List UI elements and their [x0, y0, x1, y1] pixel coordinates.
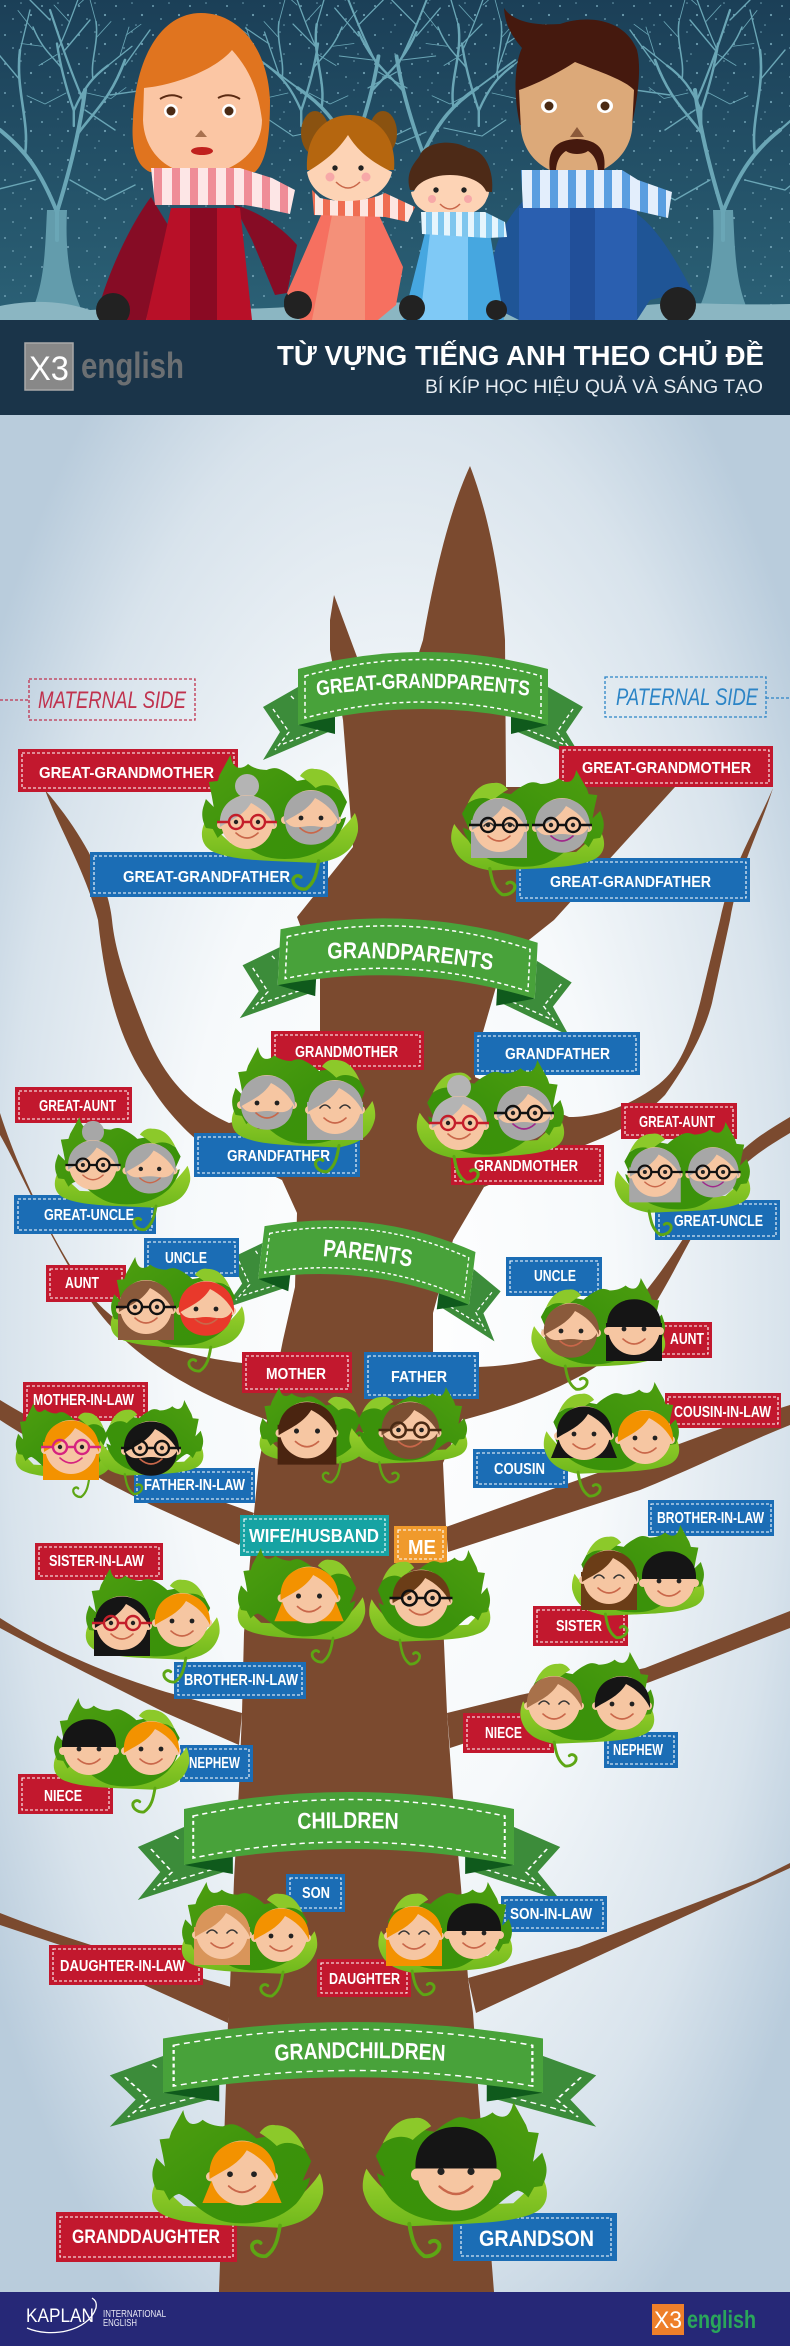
person: father — [487, 8, 696, 323]
label: great-grandmother maternal — [18, 749, 238, 792]
label: brother-in-law maternal — [174, 1662, 306, 1699]
face: mother — [276, 1402, 338, 1465]
label: uncle maternal — [144, 1238, 239, 1277]
label: wife/husband: WIFE/HUSBAND — [249, 1526, 379, 1546]
ribbon: grandparents — [240, 918, 572, 1032]
label: cousin-in-law — [665, 1393, 781, 1428]
face: daughter-in-law — [192, 1905, 252, 1965]
face: father — [378, 1402, 442, 1459]
label: great-uncle maternal — [14, 1195, 156, 1234]
label: grandmother paternal — [451, 1145, 604, 1185]
label: great-aunt paternal: GREAT-AUNT — [639, 1114, 715, 1131]
face: sister-in-law — [92, 1596, 152, 1656]
face: great-uncle paternal — [685, 1147, 741, 1198]
label: father-in-law — [134, 1468, 255, 1503]
face: cousin-in-law — [551, 1406, 617, 1460]
label: nephew maternal — [180, 1745, 253, 1782]
label: grandfather paternal: GRANDFATHER — [505, 1046, 610, 1063]
label: great-grandmother maternal: GREAT-GRANDMOTHER — [39, 765, 214, 782]
face: sister — [579, 1550, 639, 1610]
ribbon: grandchildren — [110, 2022, 596, 2127]
person: mother — [96, 13, 310, 327]
label: me: ME — [408, 1537, 436, 1559]
logo: X3english grey: english — [81, 345, 184, 386]
label: nephew paternal — [604, 1732, 678, 1768]
label: grandmother maternal — [271, 1031, 424, 1070]
label: niece maternal: NIECE — [44, 1788, 82, 1805]
label: son-in-law: SON-IN-LAW — [510, 1906, 593, 1923]
label: mother-in-law: MOTHER-IN-LAW — [33, 1392, 135, 1409]
label: grandfather paternal — [474, 1032, 640, 1075]
label: niece maternal — [18, 1774, 113, 1814]
label: granddaughter — [56, 2212, 237, 2262]
logo: X3english grey — [25, 343, 184, 390]
logo: Kaplan International English: INTERNATIONAL — [103, 2309, 166, 2320]
face: great-grandmother maternal — [217, 774, 277, 849]
maternal side tag — [0, 679, 195, 720]
leaves — [16, 755, 750, 2256]
face: grandfather maternal — [237, 1075, 297, 1130]
label: son-in-law — [501, 1896, 607, 1932]
face: daughter — [384, 1906, 444, 1966]
logo: Kaplan International English: ENGLISH — [103, 2318, 137, 2329]
label: father-in-law: FATHER-IN-LAW — [144, 1477, 246, 1494]
label: nephew paternal: NEPHEW — [613, 1742, 664, 1759]
face: son — [251, 1908, 311, 1962]
label: granddaughter: GRANDDAUGHTER — [72, 2227, 220, 2248]
label: great-uncle maternal: GREAT-UNCLE — [44, 1207, 134, 1224]
label: niece paternal — [463, 1713, 554, 1753]
label: great-uncle paternal — [655, 1200, 780, 1240]
logo: Kaplan International English: KAPLAN — [26, 2306, 94, 2327]
face: brother-in-law paternal — [639, 1551, 699, 1607]
face: grandson — [411, 2127, 501, 2210]
label: cousin: COUSIN — [494, 1461, 545, 1478]
face: niece paternal — [524, 1676, 584, 1730]
label: sister — [533, 1606, 628, 1646]
ribbon: parents — [233, 1220, 501, 1342]
face: wife/husband — [274, 1567, 344, 1623]
face: brother-in-law maternal — [152, 1593, 212, 1647]
family tree trunk and branches — [0, 466, 790, 2292]
label: mother: MOTHER — [266, 1366, 326, 1383]
label: son: SON — [302, 1885, 330, 1902]
face: cousin — [615, 1410, 675, 1464]
face: nephew paternal — [592, 1676, 652, 1730]
header band — [0, 320, 790, 415]
label: nephew maternal: NEPHEW — [189, 1755, 241, 1772]
label: grandmother paternal: GRANDMOTHER — [474, 1158, 578, 1175]
face: great-grandfather paternal — [532, 798, 592, 853]
label: cousin — [473, 1449, 568, 1488]
logo: X3english colour: english — [687, 2306, 756, 2334]
face: great-grandfather maternal — [281, 790, 341, 845]
face: uncle paternal — [541, 1303, 601, 1358]
label: great-aunt maternal — [15, 1087, 132, 1123]
label: great-grandfather paternal: GREAT-GRANDFATHER — [550, 874, 711, 891]
label: great-grandfather paternal — [516, 858, 750, 902]
footer — [0, 2292, 790, 2346]
face: grandfather paternal — [494, 1086, 554, 1141]
label: great-grandfather maternal: GREAT-GRANDFATHER — [123, 869, 290, 886]
label: daughter — [317, 1959, 411, 1997]
label: aunt paternal — [655, 1322, 712, 1358]
label: father: FATHER — [391, 1369, 447, 1386]
label: uncle paternal — [506, 1257, 602, 1296]
ribbon: grandparents: GRANDPARENTS — [328, 942, 493, 970]
face: grandmother paternal — [429, 1075, 489, 1150]
ribbon: great-grandparents — [263, 652, 583, 760]
label: son — [286, 1874, 345, 1912]
winter trees — [0, 0, 790, 320]
face: great-uncle maternal — [122, 1143, 178, 1194]
label: grandfather maternal — [194, 1133, 360, 1177]
labels — [14, 746, 781, 2262]
face: me — [390, 1570, 452, 1626]
faces — [41, 774, 741, 2210]
label: great-uncle paternal: GREAT-UNCLE — [674, 1213, 763, 1230]
logo: X3english colour — [652, 2304, 756, 2335]
label: great-grandfather maternal — [90, 852, 328, 897]
panel: header illustration — [0, 0, 790, 327]
face: nephew maternal — [121, 1721, 181, 1775]
face: uncle maternal — [176, 1281, 236, 1336]
ribbon: parents: PARENTS — [324, 1240, 412, 1266]
logo: X3english grey: X3 — [29, 350, 69, 388]
label: great-grandmother paternal: GREAT-GRANDMOTHER — [582, 760, 751, 777]
label: uncle maternal: UNCLE — [165, 1250, 207, 1267]
person: boy — [399, 143, 507, 321]
logo: X3english colour: X3 — [654, 2307, 682, 2334]
label: brother-in-law paternal — [648, 1500, 774, 1536]
label: father — [364, 1352, 479, 1399]
label: sister-in-law: SISTER-IN-LAW — [49, 1553, 145, 1570]
label: grandson: GRANDSON — [479, 2226, 594, 2251]
label: niece paternal: NIECE — [485, 1725, 522, 1742]
face: great-grandmother paternal — [469, 798, 529, 858]
label: grandmother maternal: GRANDMOTHER — [295, 1044, 398, 1061]
label: uncle paternal: UNCLE — [534, 1268, 576, 1285]
label: daughter: DAUGHTER — [329, 1971, 400, 1988]
label: sister: SISTER — [556, 1618, 602, 1635]
label: daughter-in-law: DAUGHTER-IN-LAW — [60, 1958, 186, 1975]
label: me — [394, 1526, 447, 1563]
label: grandfather maternal: GRANDFATHER — [227, 1148, 330, 1165]
ribbon: children: CHILDREN — [298, 1812, 398, 1829]
face: grandmother maternal — [305, 1080, 365, 1140]
face: granddaughter — [202, 2141, 282, 2205]
label: great-grandmother paternal — [559, 746, 773, 787]
subtitle: BÍ KÍP HỌC HIỆU QUẢ VÀ SÁNG TẠO — [425, 376, 763, 398]
face: niece maternal — [59, 1719, 119, 1775]
label: great-aunt maternal: GREAT-AUNT — [39, 1098, 116, 1115]
label: great-aunt paternal — [621, 1103, 737, 1139]
title: TỪ VỰNG TIẾNG ANH THEO CHỦ ĐỀ — [277, 339, 764, 371]
paternal side tag — [605, 677, 790, 717]
label: grandson — [453, 2213, 617, 2261]
label: daughter-in-law — [49, 1945, 203, 1985]
label: sister-in-law — [35, 1543, 163, 1580]
face: son-in-law — [444, 1903, 504, 1959]
face: aunt maternal — [116, 1280, 176, 1340]
label: aunt maternal — [46, 1265, 126, 1302]
label: mother — [242, 1352, 352, 1393]
label: mother-in-law — [23, 1382, 148, 1421]
maternal side tag: MATERNAL SIDE — [38, 687, 187, 714]
face: great-aunt paternal — [627, 1147, 683, 1202]
label: aunt paternal: AUNT — [670, 1331, 704, 1348]
logo: Kaplan International English — [26, 2298, 166, 2333]
person: girl — [284, 111, 415, 320]
label: aunt maternal: AUNT — [65, 1275, 99, 1292]
ribbon: grandchildren: GRANDCHILDREN — [275, 2042, 445, 2061]
label: brother-in-law maternal: BROTHER-IN-LAW — [184, 1672, 299, 1689]
ribbon: great-grandparents: GREAT-GRANDPARENTS — [316, 674, 530, 696]
face: great-aunt maternal — [65, 1121, 121, 1190]
face: aunt paternal — [604, 1299, 664, 1361]
label: wife/husband — [240, 1515, 389, 1556]
ribbon: children — [138, 1792, 560, 1900]
face: mother-in-law — [41, 1420, 101, 1480]
face: father-in-law — [121, 1421, 181, 1476]
